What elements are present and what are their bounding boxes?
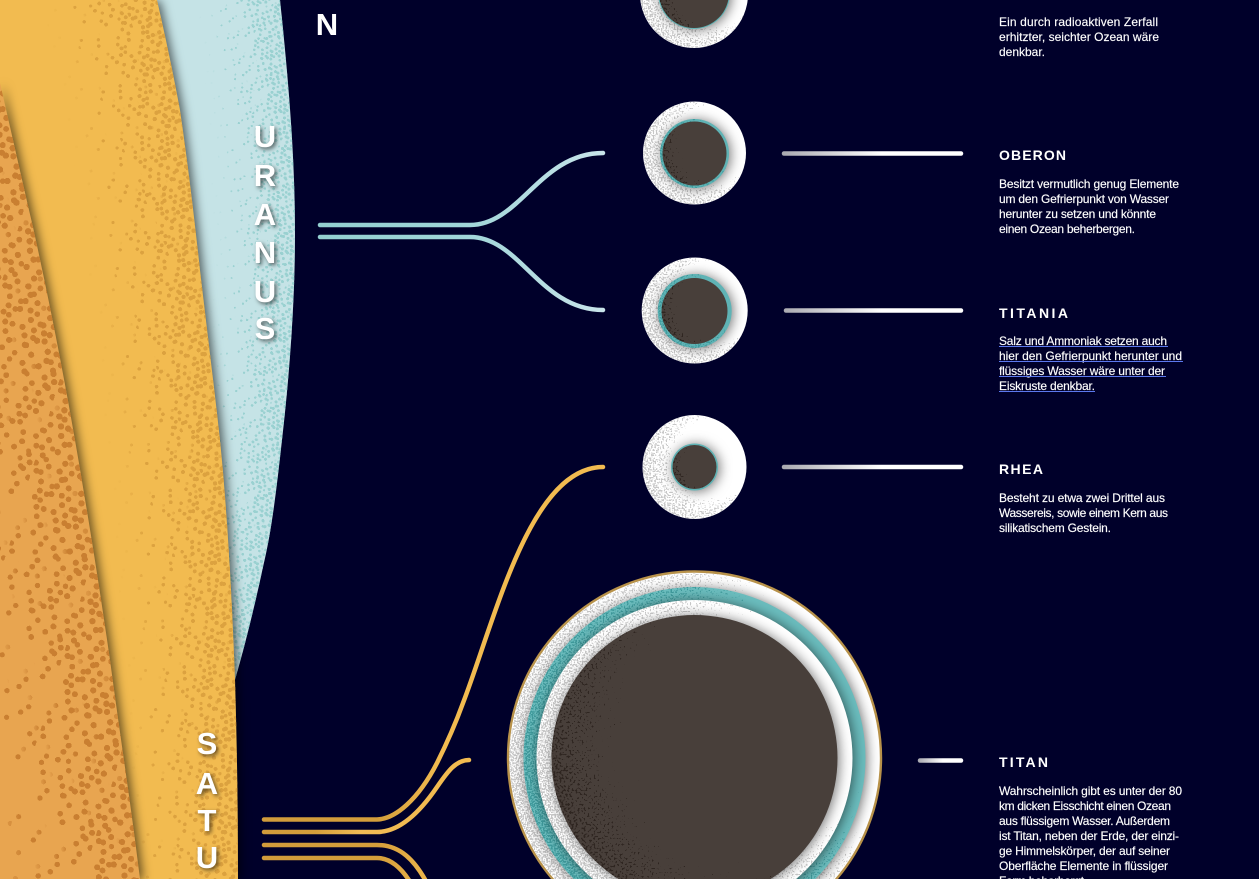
connector bar: Titan — [920, 758, 961, 763]
label: Saturn: SATU — [196, 726, 218, 875]
text block: Titania: Salz und Ammoniak setzen auch — [999, 334, 1167, 348]
connector lines: Uranus — [320, 153, 603, 310]
text block: Titan: ist Titan, neben der Erde, der einzi- — [999, 829, 1179, 843]
text block: Oberon: OBERON — [999, 147, 1066, 163]
text block: Titan: TITAN — [999, 754, 1048, 770]
text block: Oberon: herunter zu setzen und könnte — [999, 207, 1156, 221]
connector bar: Rhea — [784, 465, 961, 469]
text block: top moon: Ein durch radioaktiven Zerfall — [999, 15, 1158, 29]
text block: Titania: flüssiges Wasser wäre unter der — [999, 364, 1165, 378]
text block: top moon: denkbar. — [999, 45, 1045, 59]
text block: Titan: Oberfläche Elemente in flüssiger — [999, 859, 1168, 873]
text block: Titania — [999, 305, 1183, 393]
text block: Titan: aus flüssigem Wasser. Außerdem — [999, 814, 1170, 828]
label: Uranus: URANUS — [254, 119, 276, 346]
connector lines: Saturn — [264, 467, 603, 879]
band: Uranus pale blue — [157, 0, 295, 680]
moon: Oberon — [643, 102, 746, 204]
text block: Titan: Wahrscheinlich gibt es unter der 80 — [999, 784, 1182, 798]
band: outer orange — [0, 84, 150, 879]
connector bar: Titania — [786, 308, 961, 313]
text block: Rhea — [999, 461, 1168, 535]
text block: Rhea: RHEA — [999, 461, 1043, 477]
text block: Oberon: um den Gefrierpunkt von Wasser — [999, 192, 1169, 206]
text block: top moon — [999, 15, 1159, 59]
connector bar: Oberon — [784, 151, 961, 156]
moon: Titan — [508, 572, 881, 879]
text block: Oberon: einen Ozean beherbergen. — [999, 222, 1135, 236]
text block: Oberon: Besitzt vermutlich genug Elemente — [999, 177, 1179, 191]
text block: Titania: hier den Gefrierpunkt herunter und — [999, 349, 1182, 363]
text block: Titan — [999, 754, 1182, 879]
moon: Rhea — [642, 415, 746, 519]
moon: Titania — [642, 258, 748, 364]
panel: planet bands — [0, 0, 295, 879]
text block: Rhea: Wassereis, sowie einem Kern aus — [999, 506, 1168, 520]
text block: Titania: Eiskruste denkbar. — [999, 379, 1095, 393]
text block: Titan: km dicken Eisschicht einen Ozean — [999, 799, 1171, 813]
text block: Oberon — [999, 147, 1179, 236]
band: Saturn gold — [0, 0, 244, 879]
text block: Titania: TITANIA — [999, 305, 1068, 321]
text block: Titan: ge Himmelskörper, der auf seiner — [999, 844, 1170, 858]
label: Neptun letter N: N — [316, 7, 338, 42]
text block: Rhea: Besteht zu etwa zwei Drittel aus — [999, 491, 1165, 505]
moon: top (cropped) — [640, 0, 748, 48]
text block: top moon: erhitzter, seichter Ozean wäre — [999, 30, 1159, 44]
text block: Rhea: silikatischem Gestein. — [999, 521, 1111, 535]
